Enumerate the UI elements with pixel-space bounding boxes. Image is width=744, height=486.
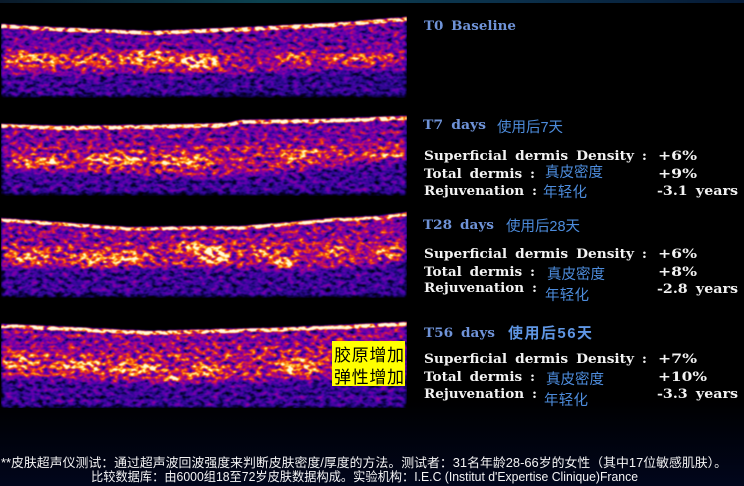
footnote <box>1 455 727 484</box>
results: T56 days: -3.3 years <box>657 387 738 402</box>
results: T7 days: 年轻化 <box>543 184 587 201</box>
results: T56 days: 年轻化 <box>544 392 588 409</box>
results: T7 days: T7 days <box>423 118 486 133</box>
results: T7 days: 使用后7天 <box>497 119 563 136</box>
results: T28 days <box>423 218 738 304</box>
results: T56 days: Total dermis : <box>424 370 535 385</box>
results: T28 days: Rejuvenation : <box>424 281 537 296</box>
results: T28 days: 真皮密度 <box>547 265 605 283</box>
footnote: 比较数据库：由6000组18至72岁皮肤数据构成。实验机构：I.E.C (Institut d'Expertise Clinique)France <box>91 469 638 484</box>
results: T7 days: -3.1 years <box>657 184 738 199</box>
results: T56 days: +10% <box>658 370 708 385</box>
results: T7 days: 真皮密度 <box>545 163 603 181</box>
results: T28 days: -2.8 years <box>657 282 738 297</box>
results: T28 days: 年轻化 <box>545 287 589 304</box>
results: T28 days: 使用后28天 <box>506 218 580 235</box>
results: T28 days: +8% <box>658 265 698 280</box>
heading: T0 baseline: T0 Baseline <box>424 19 516 34</box>
results: T56 days: 真皮密度 <box>546 370 604 388</box>
ultrasound scan: T56 days <box>1 312 407 408</box>
results: T28 days: Superficial dermis Density : <box>424 247 647 262</box>
results: T7 days: Rejuvenation : <box>424 184 537 199</box>
callout: collagen and elasticity increase: 弹性增加 <box>334 368 404 387</box>
results: T28 days: Total dermis : <box>424 265 535 280</box>
results: T56 days: Rejuvenation : <box>424 387 537 402</box>
results: T56 days <box>424 324 738 409</box>
results: T56 days: T56 days <box>424 326 495 341</box>
ultrasound scan: T28 days <box>1 210 407 298</box>
results: T56 days: 使用后56天 <box>508 324 592 342</box>
results: T7 days: Total dermis : <box>424 167 535 182</box>
callout: collagen and elasticity increase <box>332 341 405 387</box>
results: T7 days <box>423 118 738 201</box>
ultrasound scan: T0 baseline <box>1 14 407 98</box>
results: T28 days: +6% <box>658 247 698 262</box>
results: T28 days: T28 days <box>423 218 494 233</box>
callout: collagen and elasticity increase: 胶原增加 <box>334 346 404 365</box>
footnote: **皮肤超声仪测试：通过超声波回波强度来判断皮肤密度/厚度的方法。测试者：31名年龄28-66岁的女性（其中17位敏感肌肤）。 <box>1 455 727 470</box>
results: T56 days: +7% <box>658 352 698 367</box>
results: T7 days: +6% <box>658 149 698 164</box>
results: T7 days: +9% <box>658 167 698 182</box>
results: T7 days: Superficial dermis Density : <box>424 149 647 164</box>
results: T56 days: Superficial dermis Density : <box>424 352 647 367</box>
ultrasound scan: T7 days <box>1 112 407 196</box>
